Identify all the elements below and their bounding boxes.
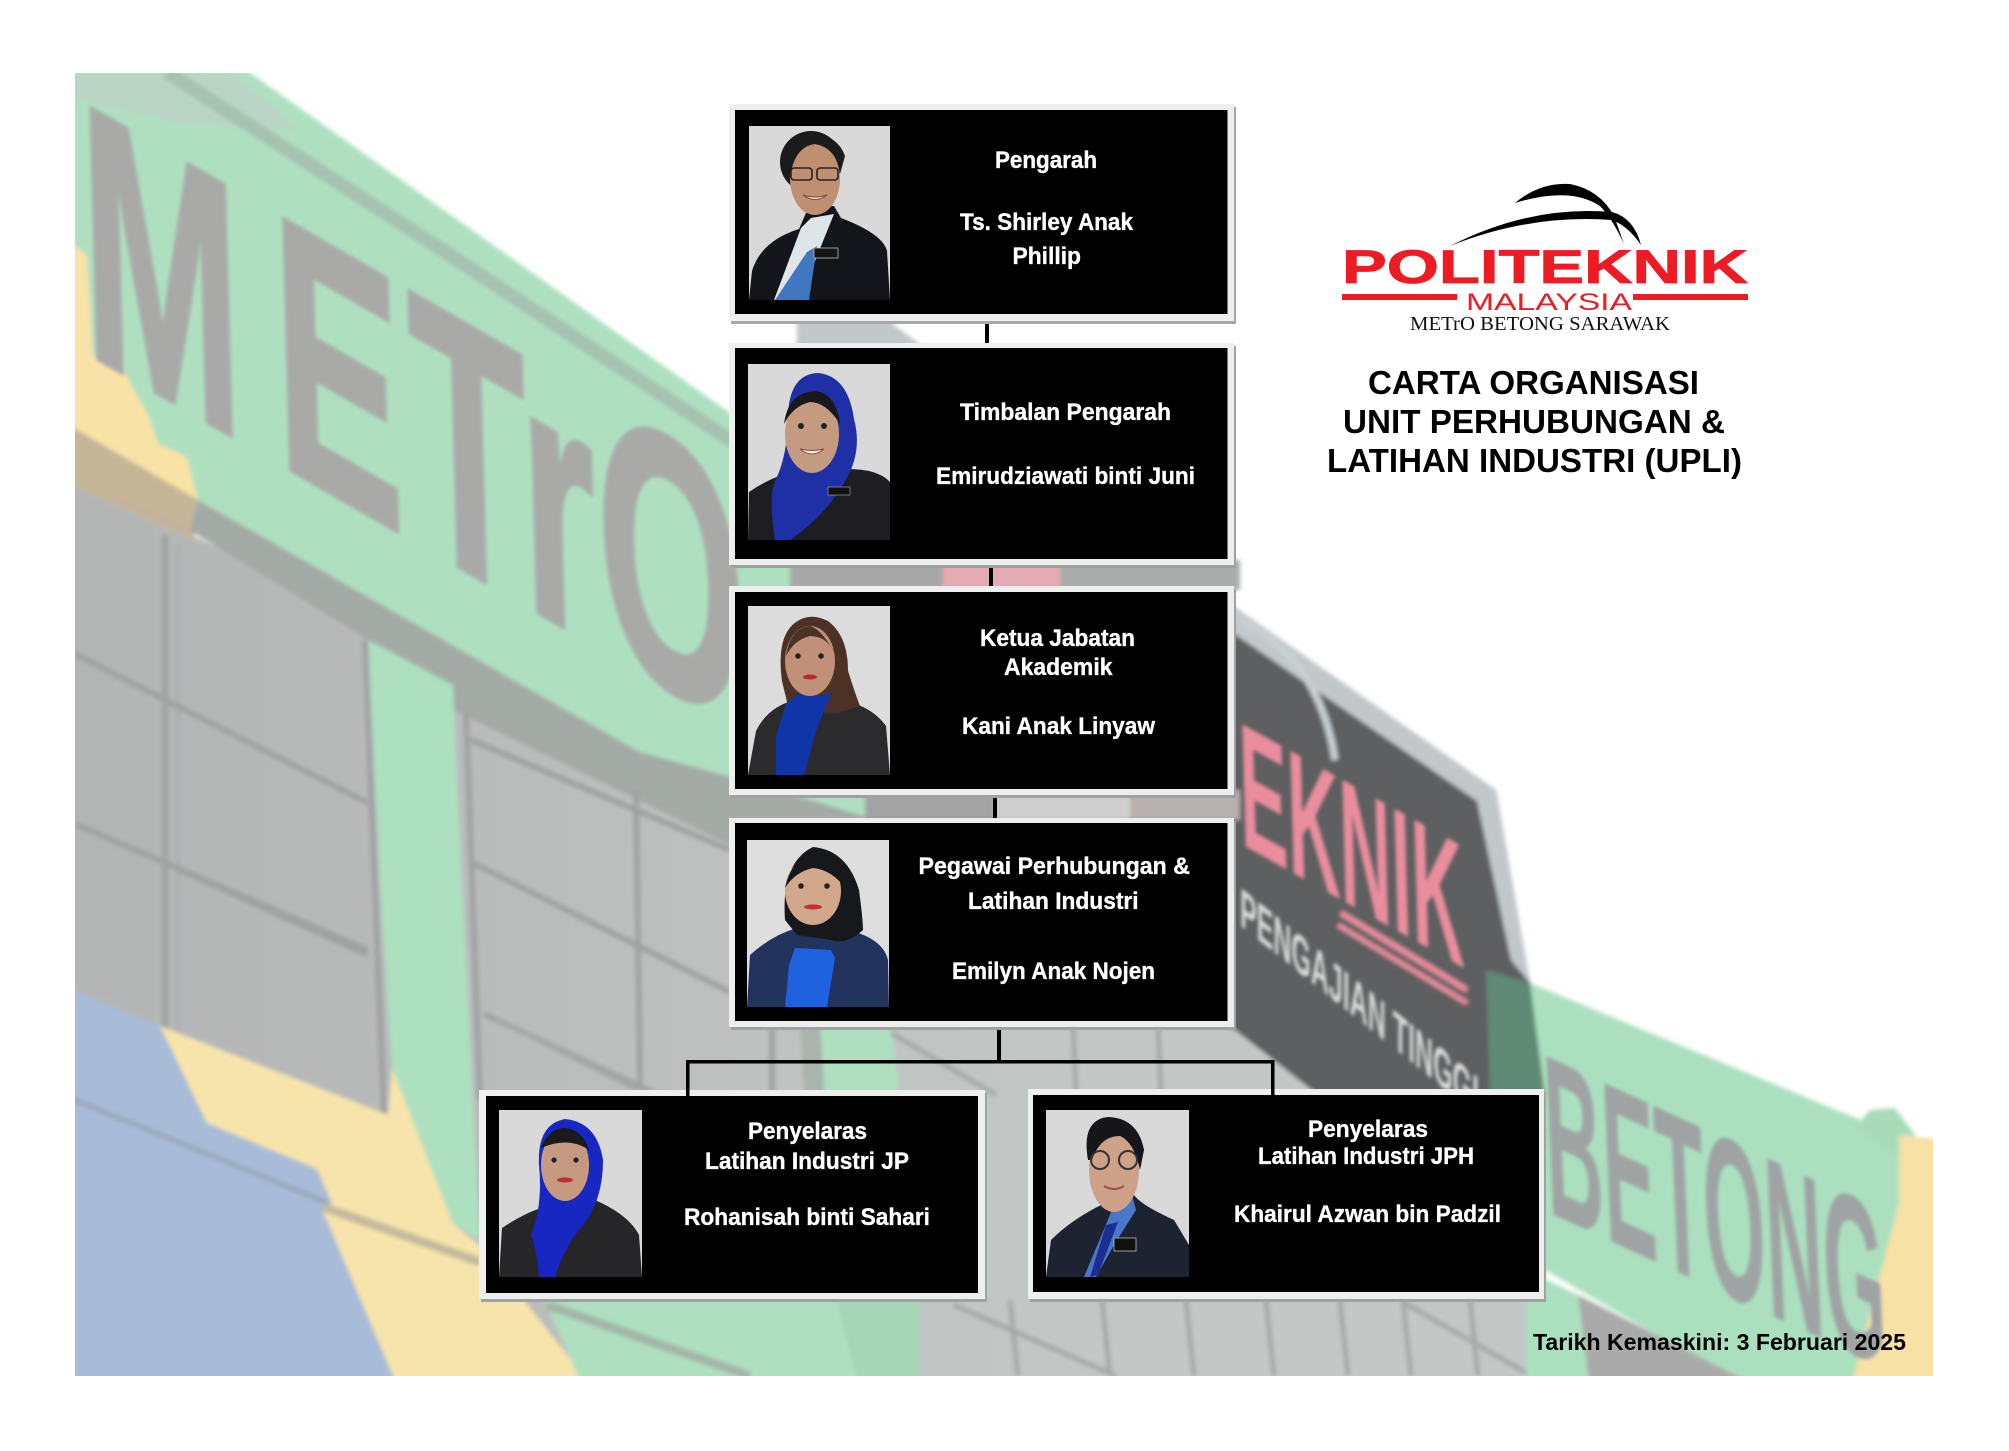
logo: Malaysia: MALAYSIA xyxy=(1466,289,1632,316)
update date: Tarikh Kemaskini: 3 Februari 2025 xyxy=(1533,1329,1906,1355)
sign sub-lettering: PENGAJIAN TINGGI xyxy=(1240,875,1479,1128)
title: UNIT PERHUBUNGAN & xyxy=(1343,403,1725,440)
logo: Politeknik Malaysia xyxy=(1342,184,1748,335)
building lettering: right wing: BETONG xyxy=(1539,1004,1891,1418)
name: Emirudziawati: Emirudziawati binti Juni xyxy=(936,463,1195,490)
portrait: Emilyn xyxy=(747,840,889,1007)
portrait: Shirley xyxy=(749,126,890,300)
title: LATIHAN INDUSTRI (UPLI) xyxy=(1327,442,1742,479)
title: CARTA ORGANISASI xyxy=(1368,364,1699,401)
panel: Timbalan Pengarah xyxy=(729,343,1236,568)
sign lettering: EKNIK xyxy=(1236,684,1466,1007)
logo: campus name: METrO BETONG SARAWAK xyxy=(1410,313,1671,335)
title: Pegawai Perhubungan: Pegawai Perhubungan & xyxy=(918,853,1190,880)
portrait: Rohanisah xyxy=(499,1110,642,1277)
title: Penyelaras: Penyelaras xyxy=(1308,1116,1428,1143)
name: Kani: Kani Anak Linyaw xyxy=(962,713,1155,740)
portrait: Kani xyxy=(748,606,890,775)
name: Emilyn: Emilyn Anak Nojen xyxy=(952,958,1155,985)
title: Akademik: Akademik xyxy=(1004,654,1113,681)
name: Rohanisah: Rohanisah binti Sahari xyxy=(684,1204,930,1231)
panel: Ketua Jabatan Akademik xyxy=(729,586,1236,798)
title: Pengarah: Pengarah xyxy=(995,147,1097,174)
panel: Pengarah xyxy=(729,104,1236,324)
title: Penyelaras: Penyelaras xyxy=(748,1118,867,1145)
panel: Penyelaras JP xyxy=(479,1090,987,1302)
name: Phillip: Phillip xyxy=(1012,243,1081,270)
title: Latihan Industri: Latihan Industri xyxy=(968,888,1139,915)
name: Khairul: Khairul Azwan bin Padzil xyxy=(1234,1201,1501,1228)
title: Latihan Industri JP: Latihan Industri JP xyxy=(705,1148,909,1175)
portrait: Emirudziawati xyxy=(748,364,890,540)
title: Timbalan Pengarah: Timbalan Pengarah xyxy=(960,399,1171,426)
icon: logo swoosh xyxy=(1450,184,1641,246)
name: Shirley: Ts. Shirley Anak xyxy=(960,209,1134,236)
connector lines xyxy=(686,322,1274,1098)
title: Ketua Jabatan: Ketua Jabatan xyxy=(980,625,1135,652)
title xyxy=(1327,364,1742,479)
title: Latihan Industri JPH: Latihan Industri JPH xyxy=(1258,1143,1474,1170)
portrait: Khairul xyxy=(1046,1110,1189,1277)
panel: Penyelaras JPH xyxy=(1028,1089,1546,1302)
panel: Pegawai Perhubungan xyxy=(729,818,1236,1030)
building lettering: METrO xyxy=(76,22,751,811)
logo wordmark: POLITEKNIK xyxy=(1342,240,1748,293)
